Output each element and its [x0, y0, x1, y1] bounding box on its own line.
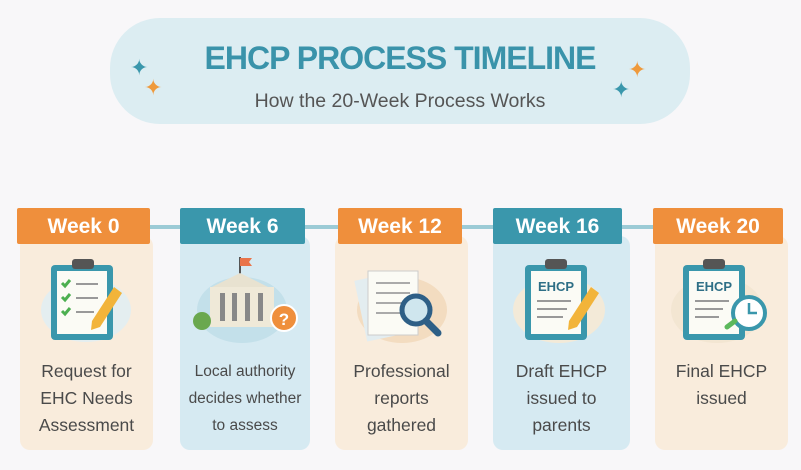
icon: reports magnifier — [354, 270, 447, 343]
banner week 6 — [180, 208, 305, 244]
banner week 12 — [338, 208, 462, 244]
icon: draft EHCP — [513, 259, 605, 343]
text: final: issued — [696, 388, 747, 408]
banner week 6: Week 6 — [206, 215, 278, 238]
text: draft: issued to — [526, 388, 597, 408]
card 2 — [180, 236, 310, 450]
text: local authority: decides whether — [189, 390, 301, 407]
text: local authority: to assess — [212, 417, 278, 434]
connector line — [140, 225, 670, 229]
text: draft: parents — [532, 415, 591, 435]
sparkles right — [612, 57, 646, 102]
text: request — [39, 361, 134, 435]
icon: building: ? — [279, 310, 289, 329]
card 3 — [335, 236, 468, 450]
sparkles right: ✦ — [628, 57, 646, 82]
text: request: EHC Needs — [40, 388, 133, 408]
icon: draft EHCP: EHCP — [538, 279, 574, 294]
text: professional — [353, 361, 450, 435]
sparkles — [130, 55, 162, 100]
banner week 20 — [653, 208, 783, 244]
banner week 0: Week 0 — [48, 215, 120, 238]
sparkles: ✦ — [130, 55, 148, 80]
text: professional: reports — [374, 388, 429, 408]
text: final — [676, 361, 767, 408]
card 5 — [655, 236, 788, 450]
text: local authority: Local authority — [195, 363, 295, 380]
text: draft — [516, 361, 607, 435]
banner week 0 — [17, 208, 150, 244]
card 1 — [20, 236, 153, 450]
banner week 20: Week 20 — [676, 215, 760, 238]
text: local authority — [189, 363, 302, 434]
banner week 16 — [493, 208, 622, 244]
icon: building — [193, 257, 298, 343]
icon: clipboard checklist — [41, 259, 131, 342]
text: professional: gathered — [367, 415, 436, 435]
icon: final EHCP clock — [671, 259, 767, 343]
banner week 16: Week 16 — [516, 215, 599, 238]
title cloud — [110, 18, 690, 124]
text: request: Assessment — [39, 415, 134, 435]
text: final: Final EHCP — [676, 361, 767, 381]
icon: final EHCP clock: EHCP — [696, 279, 732, 294]
sparkles: ✦ — [144, 75, 162, 100]
text: draft: Draft EHCP — [516, 361, 607, 381]
banner week 12: Week 12 — [358, 215, 442, 238]
sparkles right: ✦ — [612, 77, 630, 102]
text: professional: Professional — [353, 361, 450, 381]
title: EHCP PROCESS TIMELINE — [205, 40, 595, 76]
card 4 — [493, 236, 630, 450]
text: request: Request for — [41, 361, 132, 381]
subtitle: How the 20-Week Process Works — [255, 90, 545, 112]
